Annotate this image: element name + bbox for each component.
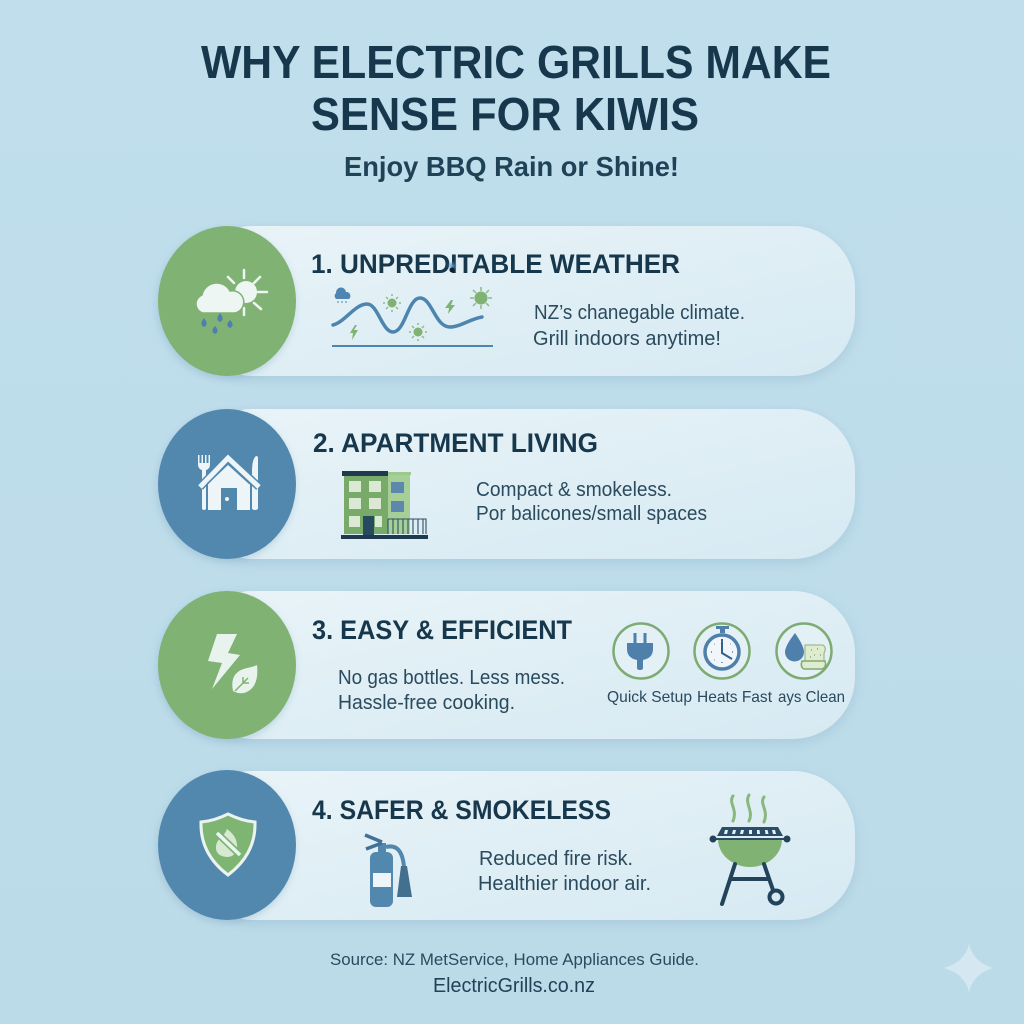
panel: easy and efficient (158, 591, 855, 739)
title (201, 36, 831, 140)
icon: grill (710, 795, 790, 904)
panel: safer and smokeless (158, 770, 855, 920)
text block: Reduced fire risk. (479, 848, 633, 870)
icon: sparkle (944, 944, 993, 992)
icon labels: ays Clean (778, 689, 845, 706)
icon: fire extinguisher (365, 835, 412, 907)
source note: Source: NZ MetService, Home Appliances Guide. (330, 950, 699, 969)
icon: energy badge (158, 591, 296, 739)
text block: Por balicones/small spaces (476, 503, 707, 525)
title: SENSE FOR KIWIS (311, 88, 699, 140)
text block (476, 479, 707, 525)
icon: drop and sponge (776, 624, 832, 678)
heading: 4. SAFER & SMOKELESS (312, 795, 611, 825)
chart: weather wave (332, 287, 493, 346)
text block (478, 848, 651, 895)
icon: home badge (158, 409, 296, 559)
icon labels: Heats Fast (697, 689, 773, 706)
icon: weather badge (158, 226, 296, 376)
icon labels: Quick Setup (607, 689, 692, 706)
icon: shield badge (158, 770, 296, 920)
text block: Grill indoors anytime! (533, 328, 721, 350)
text block: Compact & smokeless. (476, 479, 672, 501)
text block: Hassle-free cooking. (338, 692, 515, 714)
panel: unpredictable weather (158, 226, 855, 376)
text block: Healthier indoor air. (478, 873, 651, 895)
website: ElectricGrills.co.nz (433, 975, 595, 997)
title: WHY ELECTRIC GRILLS MAKE (201, 36, 831, 88)
icon labels (607, 689, 845, 706)
icon: plug (614, 624, 668, 678)
text block (533, 302, 745, 350)
heading: 1. UNPREDITABLE WEATHER (311, 249, 680, 279)
text block: No gas bottles. Less mess. (338, 667, 565, 689)
subtitle: Enjoy BBQ Rain or Shine! (344, 151, 679, 182)
heading: 3. EASY & EFFICIENT (312, 615, 572, 645)
heading: 2. APARTMENT LIVING (313, 428, 598, 458)
icon: stopwatch (694, 624, 750, 678)
misprint dot in heading (449, 263, 455, 272)
text block (338, 667, 565, 714)
icon: apartment building (341, 471, 428, 539)
text block: NZ’s chanegable climate. (534, 302, 745, 324)
panel: apartment living (158, 409, 855, 559)
